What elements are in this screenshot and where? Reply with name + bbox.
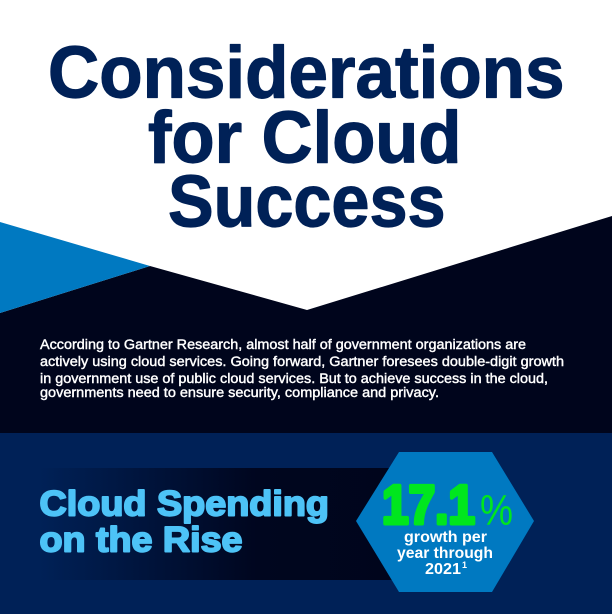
- statistic: 17.1: 17.1: [382, 474, 475, 536]
- heading: cloud spending on the rise: [40, 484, 329, 560]
- statistic: percent sign: %: [480, 487, 513, 535]
- callout text: growth per: [404, 529, 487, 546]
- hexagon shape: [356, 452, 534, 592]
- callout text: 2021: [425, 561, 461, 578]
- title: Considerations: [48, 32, 564, 114]
- callout text: 1: [462, 560, 467, 570]
- heading: cloud spending on the rise: on the Rise: [40, 520, 242, 560]
- intro text block: in government use of public cloud services. But to achieve success in the cloud,: [40, 371, 548, 386]
- intro text block: According to Gartner Research, almost half of government organizations are: [40, 337, 526, 352]
- title: Success: [168, 162, 446, 242]
- title: [48, 32, 564, 242]
- intro text block: governments need to ensure security, compliance and privacy.: [40, 385, 439, 400]
- heading: cloud spending on the rise: Cloud Spending: [40, 484, 329, 524]
- intro text block: actively using cloud services. Going forward, Gartner foresees double-digit growth: [40, 354, 564, 369]
- blue corner triangle: [0, 222, 150, 313]
- panel: cloud spending section: [0, 433, 612, 614]
- title: for Cloud: [148, 98, 462, 178]
- hexagon callout: [356, 452, 534, 592]
- callout text: [397, 529, 493, 578]
- panel: dark intro section: [0, 216, 612, 434]
- heading band with gradient: [0, 468, 400, 580]
- callout text: year through: [397, 545, 493, 562]
- panel: white header background: [0, 0, 612, 320]
- intro text block: [40, 337, 564, 400]
